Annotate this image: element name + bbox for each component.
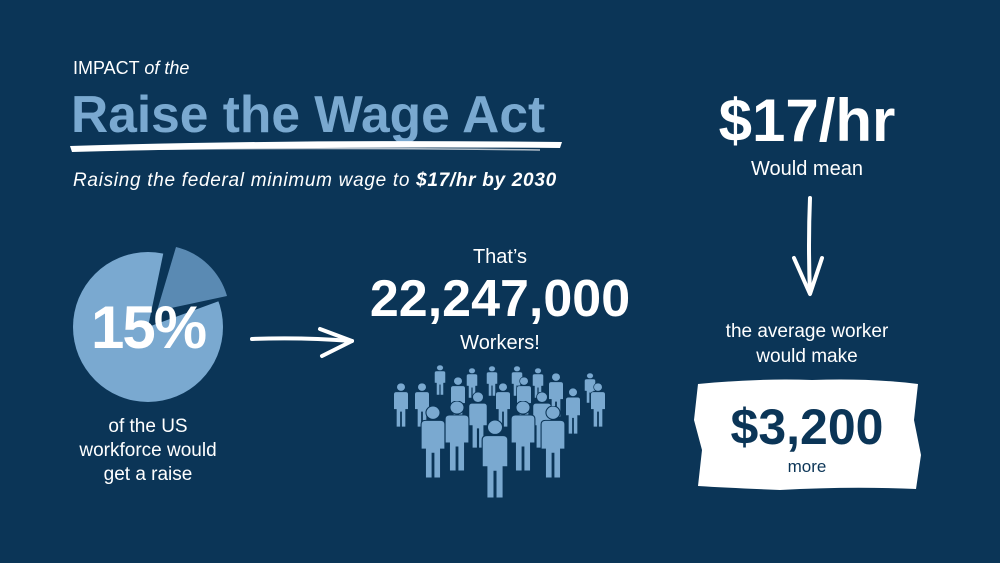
text: average worker: would make: [756, 346, 858, 367]
big number: $17/hr: $17/hr: [719, 87, 895, 154]
pie label 15%: 15%: [91, 294, 205, 361]
text: of the US workforce: workforce would: [79, 440, 217, 461]
text: that's: That’s: [473, 246, 527, 268]
number: $3,200: $3,200: [731, 399, 883, 455]
text: more: more: [788, 457, 826, 476]
text: of the US workforce: [79, 416, 217, 485]
text: average worker: [726, 321, 888, 367]
text: of the US workforce: of the US: [108, 416, 188, 437]
number: 22,247,000: 22,247,000: [370, 270, 630, 328]
title: Raise the Wage Act: [71, 85, 545, 143]
text: of the US workforce: get a raise: [104, 464, 192, 485]
text: average worker: the average worker: [726, 321, 888, 342]
subtitle: Raising the federal minimum wage to $17/hr by 2030: [73, 170, 557, 191]
text: workers: Workers!: [460, 332, 540, 354]
heading: impact of the: IMPACT of the: [73, 58, 189, 78]
text: would mean: Would mean: [751, 158, 863, 180]
